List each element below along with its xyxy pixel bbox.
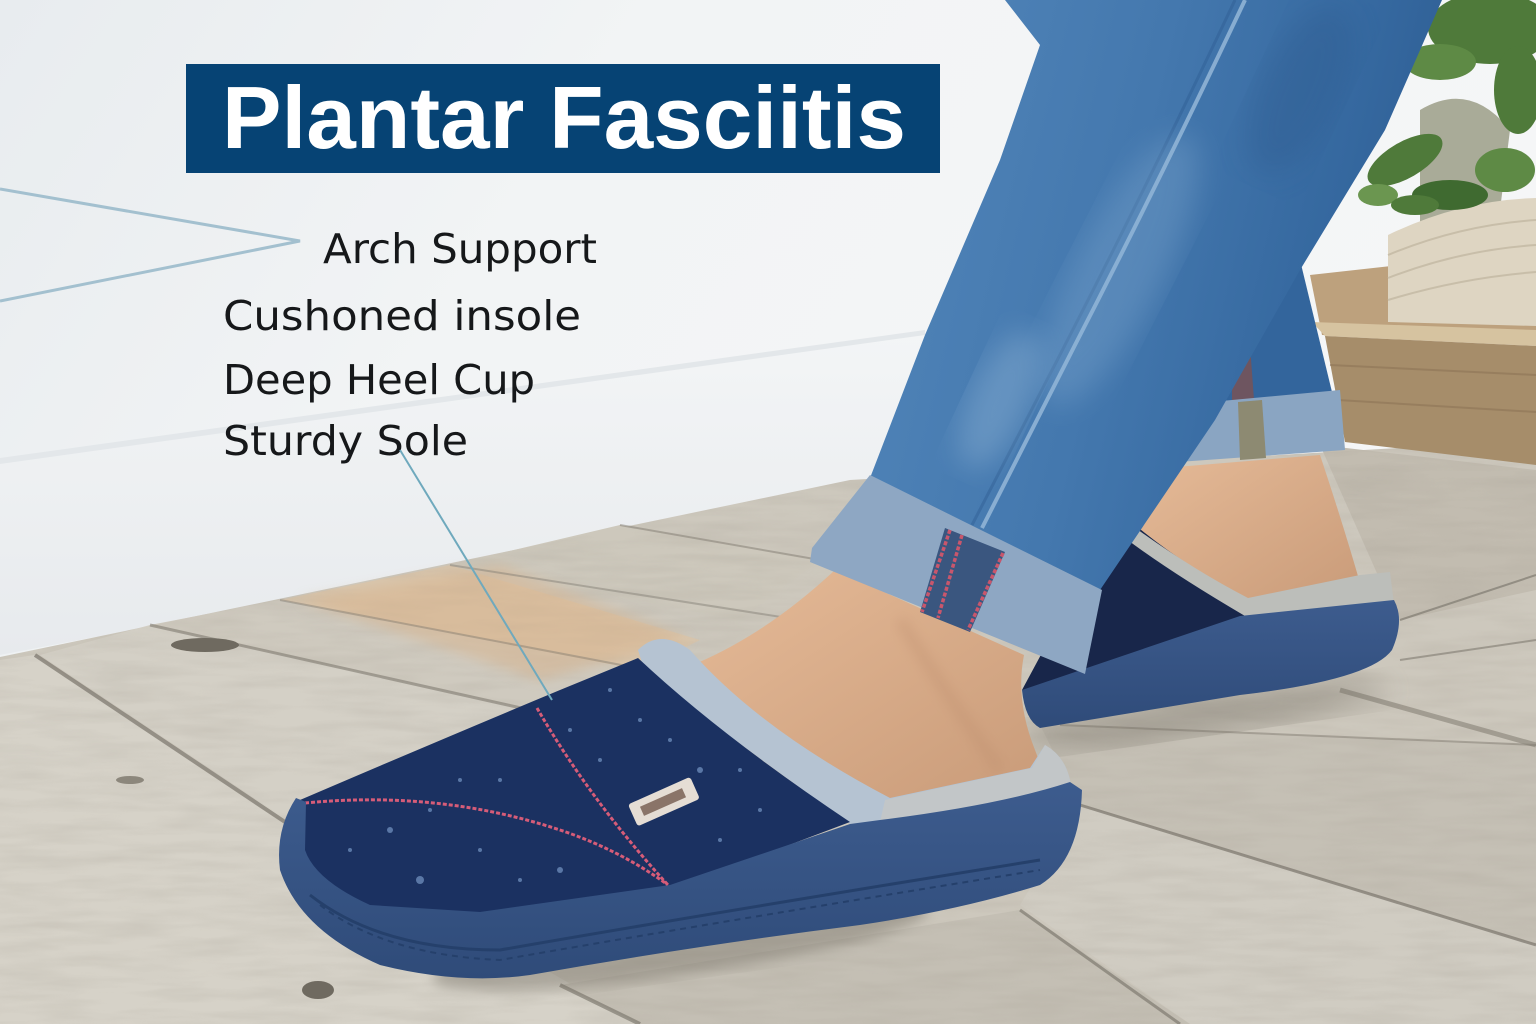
jeans cuff with stitching (810, 475, 1102, 674)
label: deep heel cup: Deep Heel Cup (223, 356, 535, 404)
callout lines to arch support (0, 189, 300, 301)
speckles (348, 688, 762, 884)
label: cushioned insole: Cushoned insole (223, 292, 581, 340)
slipper sole (279, 782, 1082, 978)
wall background (0, 0, 1536, 700)
front leg jeans (870, 0, 1442, 590)
back leg (1130, 260, 1362, 610)
slipper upper (290, 658, 850, 918)
label: sturdy sole: Sturdy Sole (223, 417, 468, 465)
front slipper (279, 639, 1082, 978)
wooden floor (0, 440, 1536, 1024)
title banner: Plantar Fasciitis (222, 68, 906, 167)
callout line to slipper (400, 450, 552, 700)
woven label (628, 777, 700, 826)
back slipper (1022, 524, 1399, 728)
front foot (680, 570, 1050, 810)
label: arch support: Arch Support (323, 225, 597, 273)
plant and basket (1310, 0, 1536, 465)
slipper fleece collar (638, 639, 1072, 824)
